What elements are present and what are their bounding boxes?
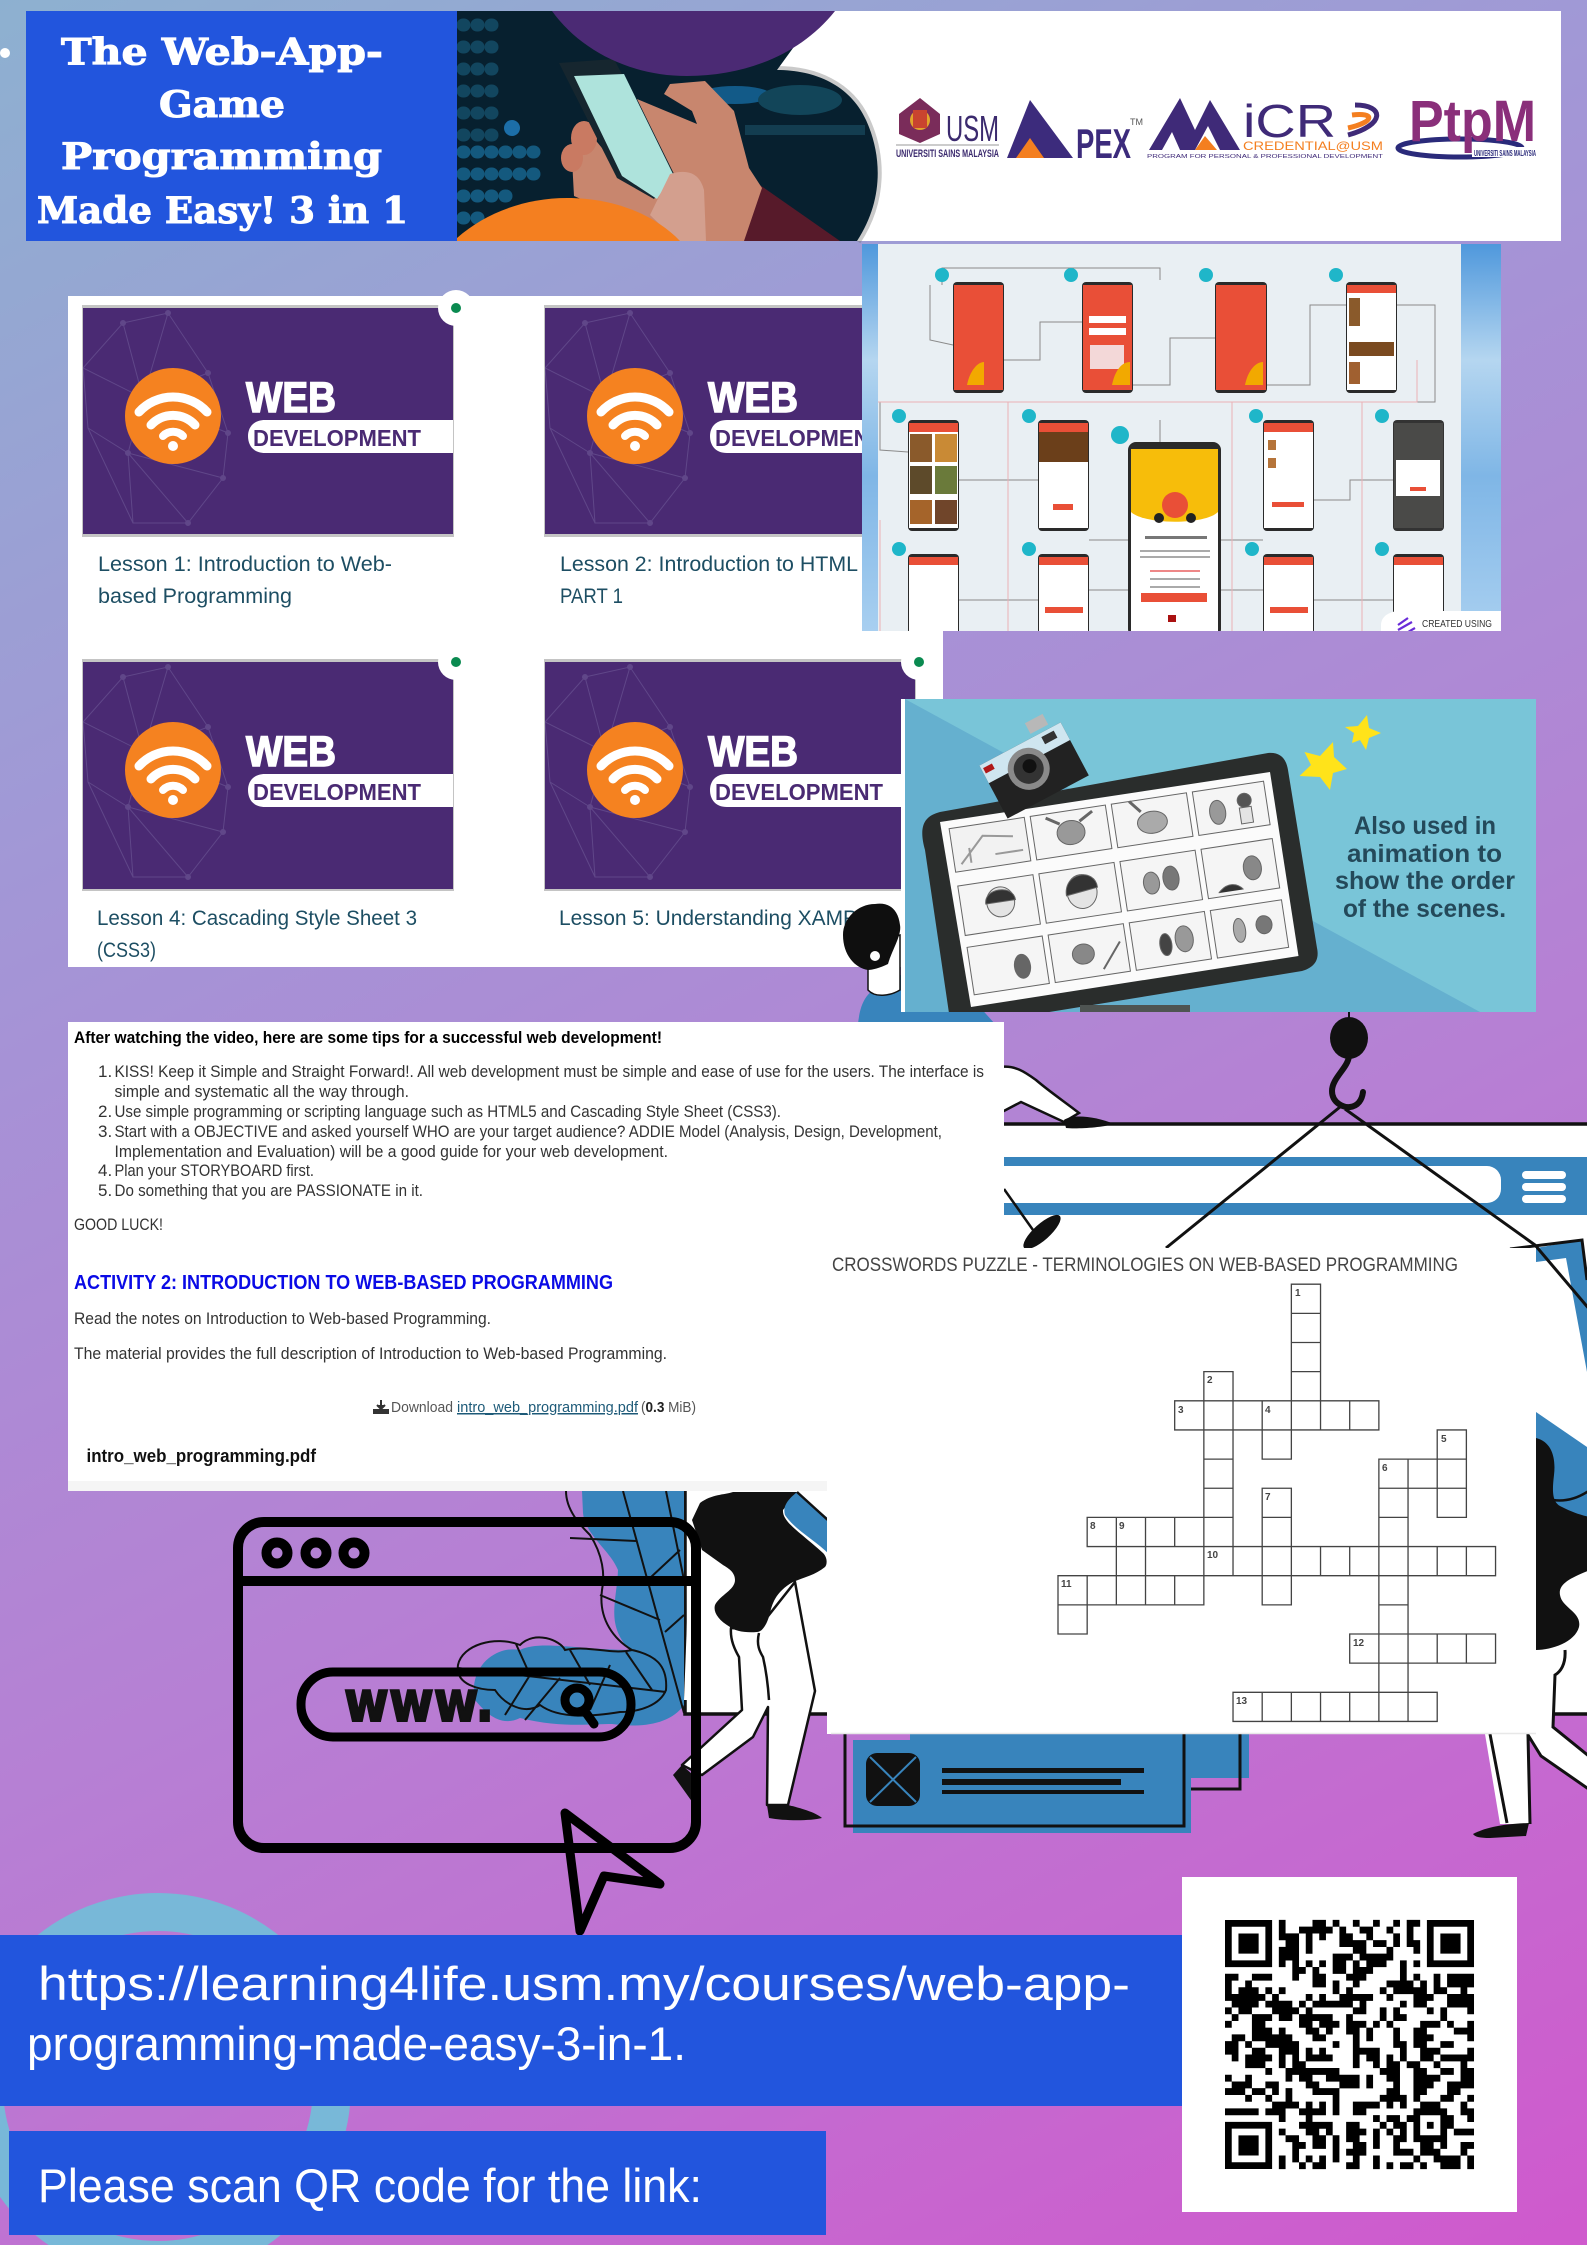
crossword numbers bbox=[1061, 1288, 1447, 1707]
bullet dot bbox=[0, 48, 10, 58]
illustration: white browser window behind panels bbox=[685, 1124, 1587, 1714]
flow: created-using badge: CREATED USING bbox=[1422, 618, 1492, 630]
lesson card 2 bbox=[544, 305, 862, 603]
flow diagram image bbox=[862, 244, 1501, 640]
crossword numbers: 11 bbox=[1061, 1579, 1072, 1590]
activity text: The material provides the full description of Introduction to Web-based Programming. bbox=[74, 1344, 667, 1363]
lesson card 4: WEB bbox=[246, 728, 336, 776]
tips list: 4. bbox=[98, 1161, 112, 1180]
logo: USM bbox=[896, 98, 999, 160]
storyboard caption: Also used in bbox=[1354, 812, 1496, 840]
activity text: Read the notes on Introduction to Web-based Programming. bbox=[74, 1309, 491, 1328]
tips list: 2. bbox=[98, 1102, 112, 1121]
logo: APEX: TM bbox=[1130, 117, 1143, 127]
lesson card 5 bbox=[544, 659, 916, 930]
illustration: person on right bbox=[1473, 1438, 1587, 1838]
download line: (0.3 MiB) bbox=[641, 1399, 696, 1416]
file name: intro_web_programming.pdf bbox=[86, 1446, 317, 1466]
crossword numbers: 12 bbox=[1353, 1638, 1365, 1649]
lesson card 2: Lesson 2: Introduction to HTML bbox=[560, 553, 858, 576]
qr code panel bbox=[1182, 1877, 1517, 2212]
crossword numbers: 9 bbox=[1119, 1521, 1125, 1532]
logo: APEX: PEX bbox=[1076, 120, 1131, 167]
tips list: Plan your STORYBOARD first. bbox=[114, 1161, 314, 1180]
lesson card 2: PART 1 bbox=[560, 585, 623, 608]
lesson card 4: DEVELOPMENT bbox=[253, 779, 421, 805]
download line: intro_web_programming.pdf bbox=[457, 1399, 639, 1416]
lesson card 2: WEB bbox=[708, 374, 798, 422]
lesson card 4: Lesson 4: Cascading Style Sheet 3 bbox=[97, 907, 417, 930]
flow: central payment phone bbox=[1128, 442, 1221, 639]
title block: The Web-App- bbox=[61, 32, 383, 74]
url bar: https://learning4life.usm.my/courses/web-app- bbox=[38, 1957, 1130, 2010]
tips list: 3. bbox=[98, 1122, 112, 1141]
scan prompt bar: Please scan QR code for the link: bbox=[38, 2159, 702, 2212]
decorative cyan ring bbox=[0, 1912, 332, 2245]
crossword grid bbox=[1058, 1284, 1496, 1721]
title block: Programming bbox=[61, 136, 382, 178]
tips list: KISS! Keep it Simple and Straight Forward!. All web development must be simple and ease of use for the users. The interface is bbox=[114, 1062, 984, 1081]
title block bbox=[26, 11, 457, 241]
tips list: 5. bbox=[98, 1181, 112, 1200]
logo: MICRO credential: CREDENTIAL@USM bbox=[1243, 139, 1383, 153]
crossword numbers: 5 bbox=[1441, 1434, 1447, 1445]
tips heading: After watching the video, here are some tips for a successful web development! bbox=[74, 1028, 662, 1047]
tips list: simple and systematic all the way through. bbox=[114, 1082, 409, 1101]
tips list: Use simple programming or scripting language such as HTML5 and Cascading Style Sheet (CSS3). bbox=[114, 1102, 781, 1121]
good luck line: GOOD LUCK! bbox=[74, 1215, 163, 1234]
illustration: person head and shirt bbox=[843, 904, 995, 1024]
flow: second row phones bbox=[908, 420, 1444, 531]
panel: crossword bbox=[827, 1248, 1536, 1734]
storyboard caption: show the order bbox=[1335, 867, 1515, 895]
illustration: person walking, lower body bbox=[673, 1491, 830, 1820]
lesson card 1 bbox=[82, 305, 454, 608]
logo: USM: USM bbox=[946, 108, 999, 149]
crossword numbers: 3 bbox=[1178, 1405, 1184, 1416]
mouse cursor arrow bbox=[565, 1813, 660, 1931]
lesson card 5: Lesson 5: Understanding XAMPP bbox=[559, 907, 871, 930]
download line bbox=[374, 1399, 696, 1416]
tips list: Do something that you are PASSIONATE in it. bbox=[114, 1181, 423, 1200]
flow: step markers bbox=[892, 268, 1389, 556]
banner photo: hand holding phone bbox=[457, 11, 887, 241]
lesson card 2: DEVELOPMENT bbox=[715, 425, 883, 451]
title block: Made Easy! 3 in 1 bbox=[37, 190, 408, 232]
download line: Download bbox=[391, 1399, 453, 1416]
title block: Game bbox=[159, 84, 285, 126]
storyboard caption: of the scenes. bbox=[1343, 895, 1506, 923]
lesson card 4: (CSS3) bbox=[97, 939, 156, 962]
illustration: blue card below crossword bbox=[845, 1700, 1249, 1833]
crane hook bbox=[1166, 1012, 1587, 1310]
activity text bbox=[74, 1309, 667, 1363]
flow: created-using badge bbox=[1381, 611, 1501, 631]
tips list: Start with a OBJECTIVE and asked yourself WHO are your target audience? ADDIE Model (Analysis, Design, Development, bbox=[114, 1122, 942, 1141]
crossword numbers: 10 bbox=[1207, 1550, 1219, 1561]
storyboard caption bbox=[1335, 812, 1515, 923]
url bar: programming-made-easy-3-in-1. bbox=[27, 2017, 686, 2070]
logo: PtpM: PtpM bbox=[1409, 89, 1536, 154]
lesson card 1: DEVELOPMENT bbox=[253, 425, 421, 451]
lesson card 5: DEVELOPMENT bbox=[715, 779, 883, 805]
flow connectors bbox=[880, 268, 1435, 600]
crossword numbers: 7 bbox=[1265, 1492, 1271, 1503]
lesson card 4 bbox=[82, 659, 454, 962]
crossword numbers: 8 bbox=[1090, 1521, 1096, 1532]
crossword numbers: 4 bbox=[1265, 1405, 1271, 1416]
browser window outline with search bar bbox=[238, 1522, 696, 1848]
tips list: Implementation and Evaluation) will be a good guide for your web development. bbox=[114, 1142, 668, 1161]
storyboard image bbox=[901, 699, 1536, 1020]
logo: APEX bbox=[1007, 100, 1143, 167]
storyboard caption: animation to bbox=[1347, 840, 1502, 868]
crossword title: CROSSWORDS PUZZLE - TERMINOLOGIES ON WEB-BASED PROGRAMMING bbox=[832, 1255, 1458, 1276]
icon: stars bbox=[1300, 715, 1381, 790]
logo: PtpM: UNIVERSITI SAINS MALAYSIA bbox=[1474, 149, 1536, 158]
scan prompt bar bbox=[9, 2131, 826, 2235]
banner bbox=[26, 11, 1561, 241]
illustration: person walking, upper leg and shoes bbox=[1000, 1067, 1114, 1254]
browser window outline with search bar: www. bbox=[344, 1670, 494, 1735]
panel: lessons bbox=[68, 290, 943, 967]
icon: camera bbox=[980, 714, 1089, 818]
crossword numbers: 2 bbox=[1207, 1375, 1213, 1386]
flow: top row phones bbox=[953, 282, 1397, 393]
logo: MICRO credential bbox=[1147, 95, 1384, 160]
url bar bbox=[0, 1935, 1182, 2106]
lesson card 1: WEB bbox=[246, 374, 336, 422]
lesson card 1: based Programming bbox=[98, 585, 292, 608]
tips list bbox=[98, 1062, 984, 1200]
crossword numbers: 6 bbox=[1382, 1463, 1388, 1474]
tips list: 1. bbox=[98, 1062, 112, 1081]
crossword numbers: 1 bbox=[1295, 1288, 1301, 1299]
logo: USM: UNIVERSITI SAINS MALAYSIA bbox=[896, 148, 999, 160]
lesson card 5: WEB bbox=[708, 728, 798, 776]
panel: tips and activity bbox=[68, 1022, 1004, 1491]
flow: third row phones bbox=[908, 554, 1444, 637]
activity heading: ACTIVITY 2: INTRODUCTION TO WEB-BASED PROGRAMMING bbox=[74, 1272, 613, 1294]
illustration: blue leaves and cloud bbox=[458, 1491, 684, 1726]
logo: MICRO credential: iCR bbox=[1243, 95, 1336, 147]
lesson card 1: Lesson 1: Introduction to Web- bbox=[98, 553, 392, 576]
logo: MICRO credential: PROGRAM FOR PERSONAL & PROFESSIONAL DEVELOPMENT bbox=[1147, 154, 1384, 160]
completion status dots bbox=[438, 290, 937, 680]
crossword numbers: 13 bbox=[1236, 1696, 1248, 1707]
storyboard: monitor with sketches bbox=[922, 753, 1318, 1020]
